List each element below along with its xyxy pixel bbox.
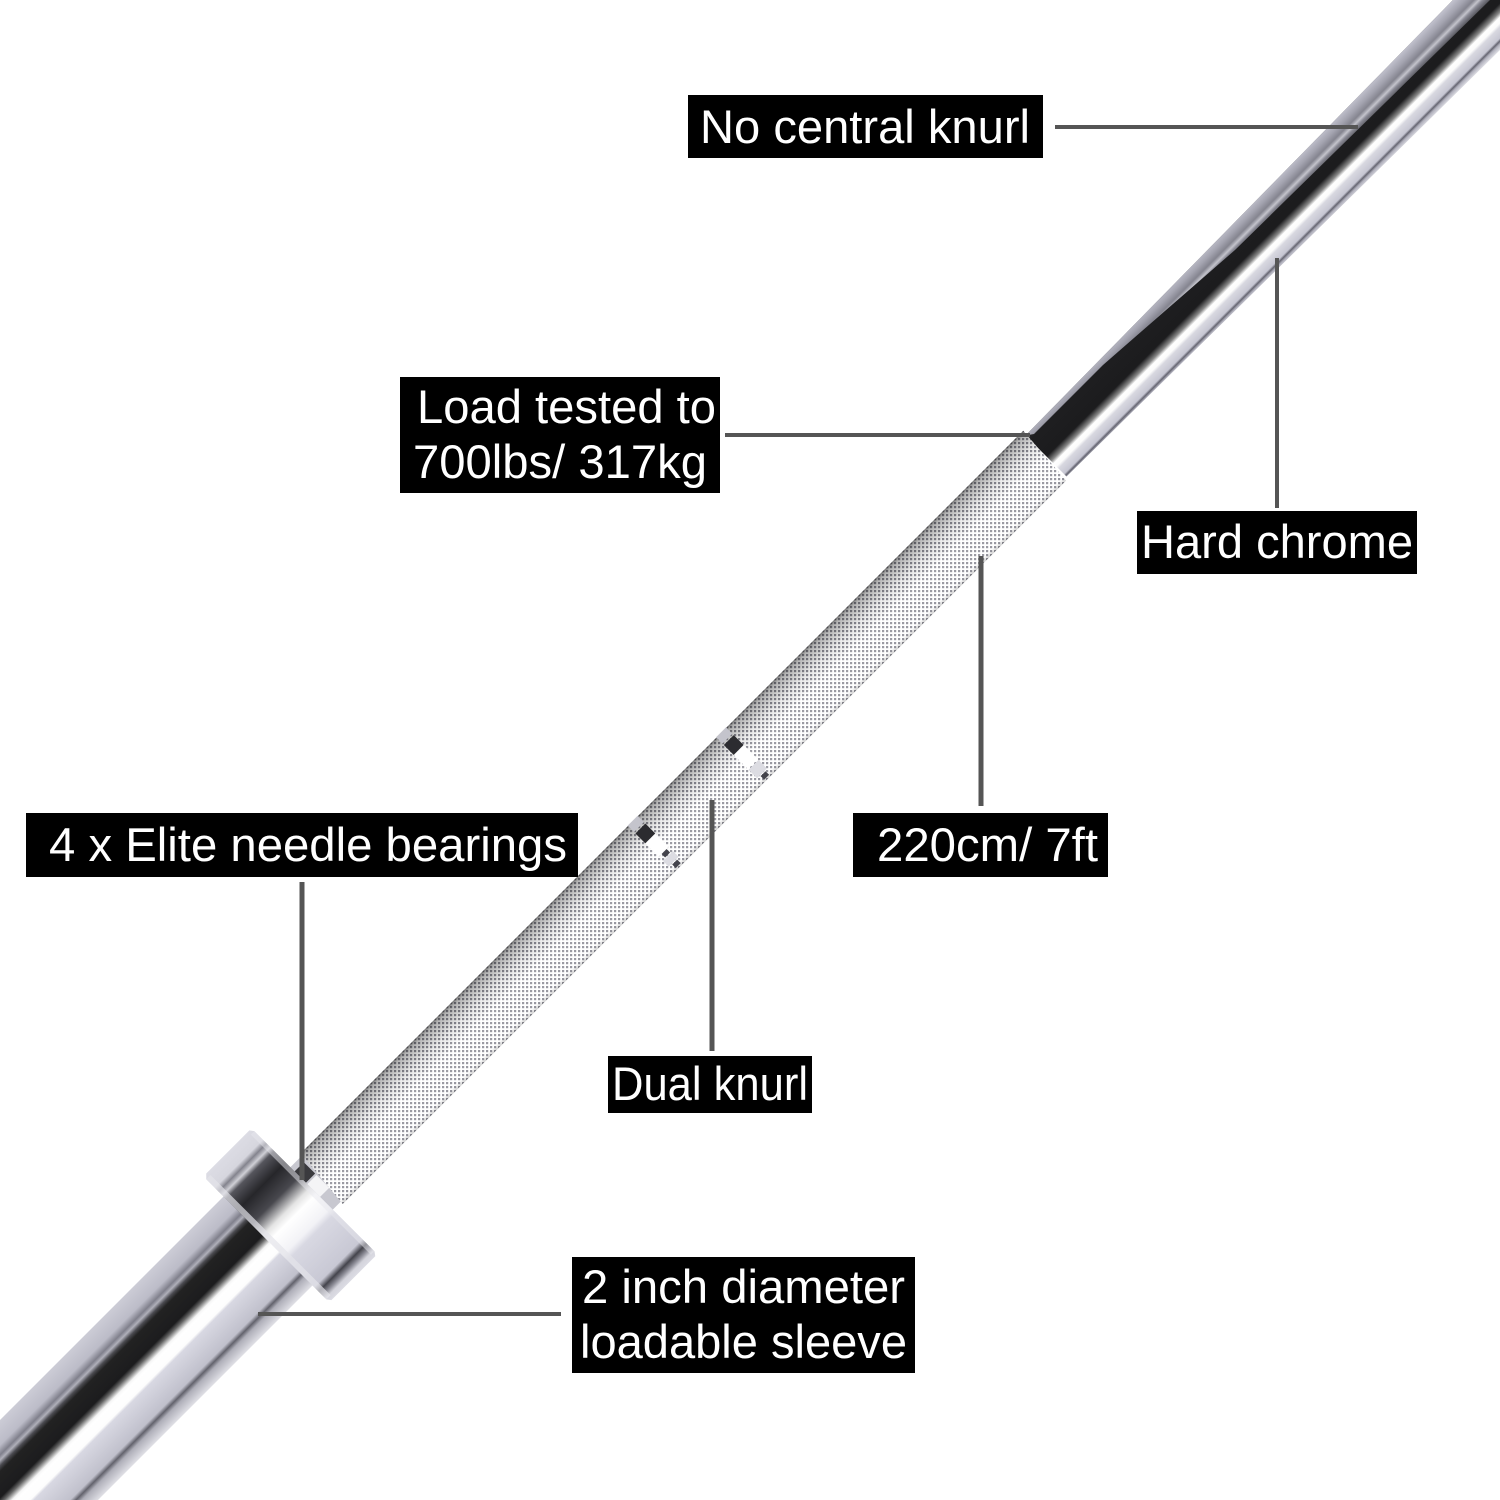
callout line: 220cm length (978, 556, 984, 806)
collar (203, 1128, 377, 1302)
callout line: hard chrome (1275, 258, 1279, 508)
callout line: needle bearings (300, 882, 304, 1180)
label: hard chrome: Hard chrome (1141, 515, 1413, 568)
label: load tested: 700lbs/ 317kg (413, 435, 707, 488)
label: dual knurl: Dual knurl (612, 1057, 808, 1110)
callout line: no central knurl (1055, 125, 1358, 129)
dual knurl groove: lower (628, 816, 683, 871)
callout line: dual knurl (710, 800, 714, 1051)
shaft: hard chrome upper section (1026, 0, 1500, 476)
label: load tested: Load tested to (417, 380, 716, 433)
callout line: load tested (725, 433, 1030, 437)
rotated parts of the bar (203, 394, 1112, 1302)
knurled grip section (296, 431, 1070, 1204)
label: sleeve: 2 inch diameter (582, 1260, 905, 1313)
label: 220cm: 220cm/ 7ft (877, 818, 1098, 871)
dual knurl groove: upper (716, 727, 771, 783)
label: load tested (400, 377, 720, 493)
label: sleeve: loadable sleeve (580, 1315, 907, 1368)
shaft neck beside collar (287, 1152, 348, 1213)
label: no central knurl: No central knurl (700, 100, 1030, 153)
loadable sleeve (0, 1170, 340, 1500)
callout line: sleeve (258, 1312, 561, 1316)
label: needle bearings: 4 x Elite needle bearings (49, 818, 567, 871)
label: sleeve (572, 1257, 915, 1373)
shaft: upper reflection band (1026, 0, 1490, 436)
